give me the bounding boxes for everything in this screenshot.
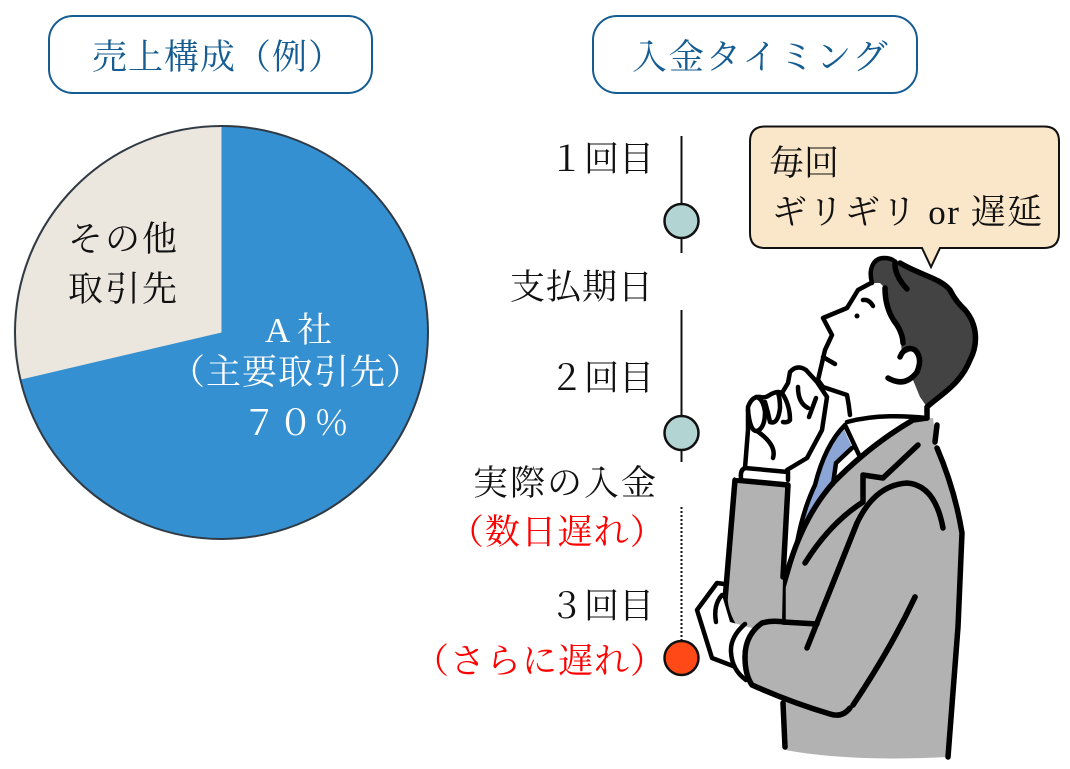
necktie [797, 427, 852, 543]
heading: payment timing: 入金タイミング [632, 38, 890, 77]
speech bubble [750, 126, 1059, 267]
timeline labels: ３回目 [549, 587, 654, 626]
heading: payment timing [593, 16, 917, 93]
lower hand [697, 583, 752, 668]
pie label: other clients [68, 220, 179, 309]
timeline labels: 実際の入金 [473, 464, 658, 503]
pie label: company A 70% [170, 311, 422, 443]
pie label: company A 70%: （主要取引先） [170, 353, 422, 392]
marker: second payment [664, 416, 698, 450]
face and neck [818, 283, 927, 418]
hair and face outlines [818, 258, 975, 418]
shirt collar [847, 416, 927, 457]
pie label: company A 70%: A 社 [265, 311, 332, 350]
pie label: other clients: その他 [68, 220, 179, 259]
timeline labels: ２回目 [549, 359, 654, 398]
speech bubble: 毎回 [769, 144, 839, 183]
marker: first payment [664, 204, 698, 238]
timeline labels: １回目 [549, 140, 654, 179]
timeline labels: （数日遅れ） [449, 513, 666, 552]
upper hand on chin [735, 366, 827, 480]
heading: sales composition: 売上構成（例） [92, 38, 344, 77]
forearm and cuff [731, 523, 915, 715]
timeline labels: （さらに遅れ） [414, 642, 666, 681]
pie label: other clients: 取引先 [68, 270, 179, 309]
timeline labels [414, 140, 666, 681]
marker: third payment [664, 641, 698, 675]
raised sleeve [725, 480, 788, 640]
speech bubble: ギリギリ or 遅延 [772, 193, 1044, 232]
pie label: company A 70%: ７０％ [242, 404, 350, 443]
pie chart: sales composition [13, 126, 428, 539]
heading: sales composition [49, 16, 372, 93]
jacket body [783, 418, 962, 758]
timeline labels: 支払期日 [510, 268, 654, 307]
jacket lapels and seams [783, 418, 962, 757]
timeline [664, 136, 698, 675]
hair [871, 258, 975, 407]
illustration: businessman looking up [697, 258, 975, 758]
